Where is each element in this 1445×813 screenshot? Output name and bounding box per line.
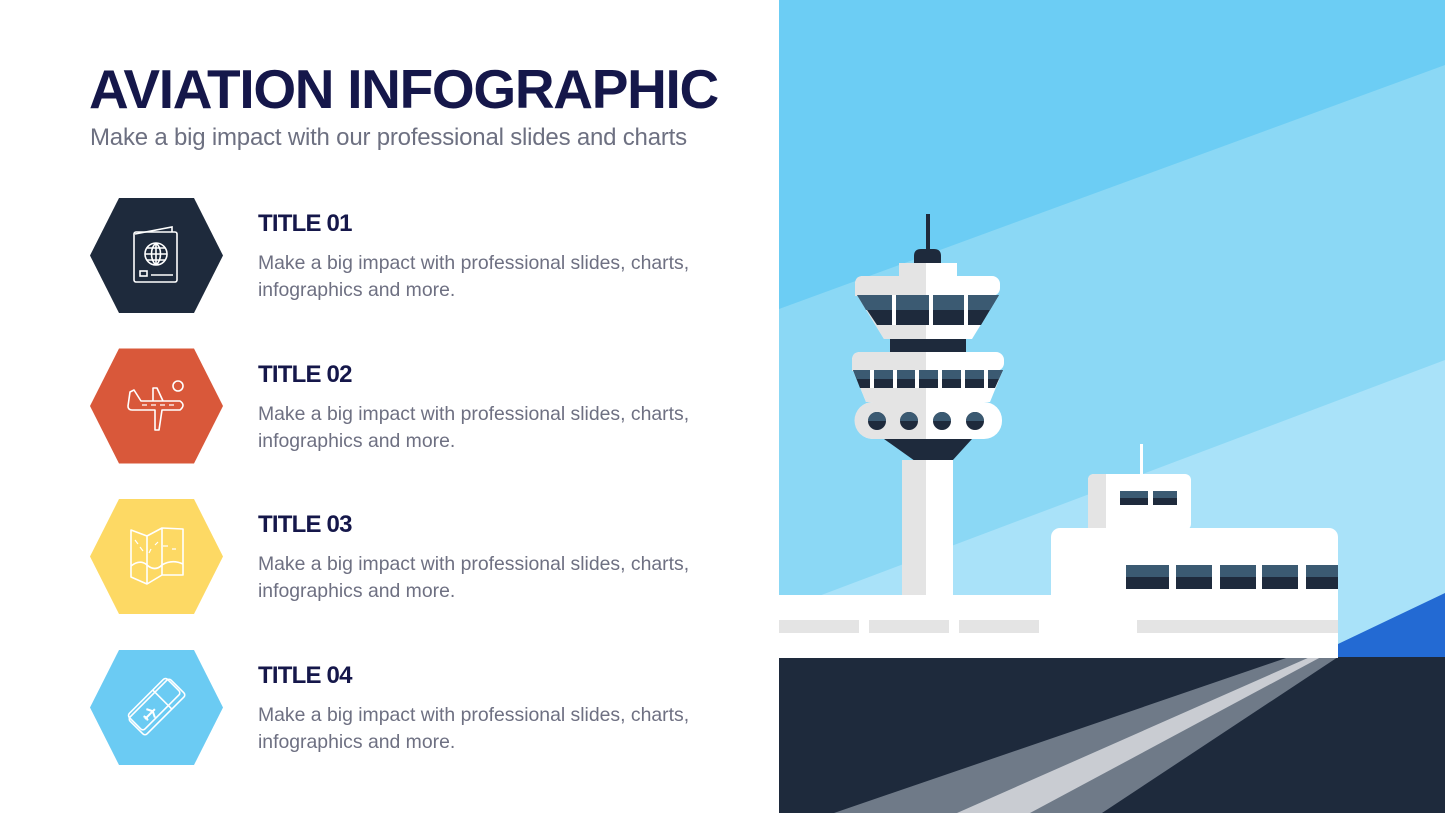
tower bbox=[852, 214, 1004, 596]
icon: map hexagon bbox=[90, 499, 223, 614]
text block: title 02: TITLE 02 bbox=[258, 361, 352, 388]
text block: title 04: Make a big impact with professional slides, charts, bbox=[258, 704, 689, 726]
text block: title 03: infographics and more. bbox=[258, 580, 455, 602]
text block: title 03: Make a big impact with professional slides, charts, bbox=[258, 553, 689, 575]
hexagon icons column bbox=[90, 198, 223, 765]
ground and runway bbox=[779, 657, 1445, 813]
icon: passport hexagon bbox=[90, 198, 223, 313]
text block: title 01: TITLE 01 bbox=[258, 210, 352, 237]
text block: title 02: Make a big impact with professional slides, charts, bbox=[258, 403, 689, 425]
sky bbox=[779, 0, 1445, 660]
icon: ticket hexagon bbox=[90, 650, 223, 765]
text block: title 04: TITLE 04 bbox=[258, 662, 352, 689]
text block: title 01 bbox=[258, 210, 689, 301]
text block: title 01: Make a big impact with professional slides, charts, bbox=[258, 252, 689, 274]
illustration: airport control tower bbox=[779, 0, 1445, 813]
text block: title 04 bbox=[258, 662, 689, 753]
text block: title 04: infographics and more. bbox=[258, 731, 455, 753]
subtitle: Make a big impact with our professional slides and charts bbox=[90, 124, 687, 151]
text block: title 03 bbox=[258, 511, 689, 602]
icon: airplane hexagon bbox=[90, 348, 223, 464]
text block: title 03: TITLE 03 bbox=[258, 511, 352, 538]
title: AVIATION INFOGRAPHIC bbox=[89, 58, 718, 120]
text block: title 02 bbox=[258, 361, 689, 452]
terminal building bbox=[779, 444, 1338, 658]
text block: title 02: infographics and more. bbox=[258, 430, 455, 452]
text block: title 01: infographics and more. bbox=[258, 279, 455, 301]
